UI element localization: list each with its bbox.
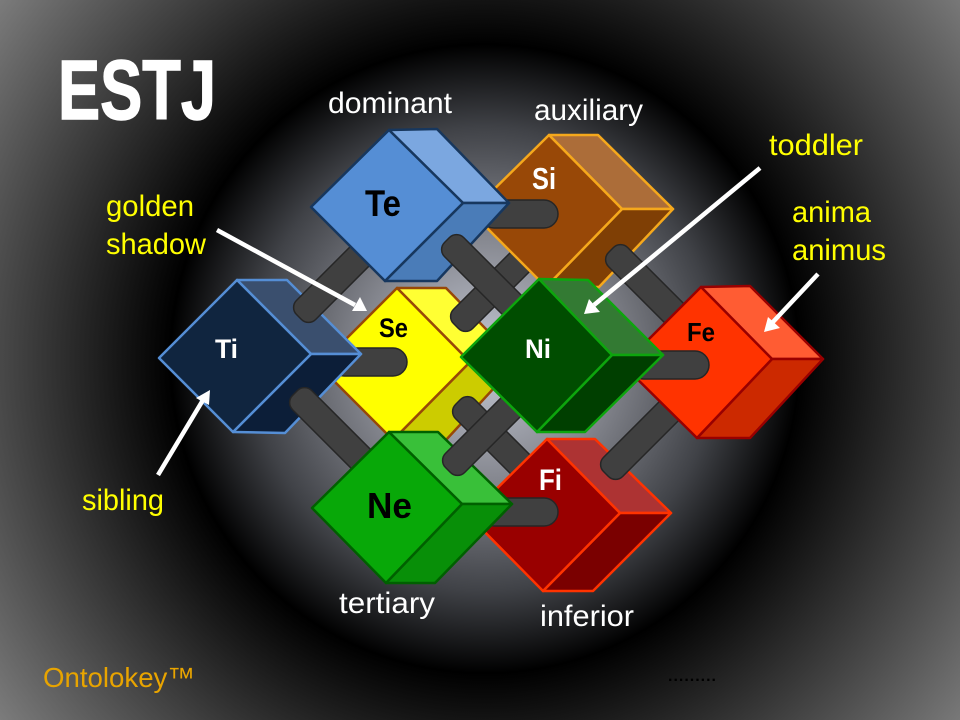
arrow: anima animus to Fe [764, 274, 818, 332]
connector bar: Te to Ti [289, 230, 386, 327]
cube: Ni toddler: Ni [525, 334, 551, 364]
cube: Te dominant: Te [365, 183, 401, 224]
label: anima animus: animus [792, 234, 886, 267]
connector bar: Ni to Fe [630, 351, 709, 379]
arrow: toddler to Ni [584, 168, 760, 314]
connector bar: Ti to Ne [285, 383, 379, 477]
label: sibling: sibling [82, 484, 164, 517]
label: auxiliary: auxiliary [534, 94, 643, 127]
connector bar: Te to Ni [437, 230, 541, 334]
connector bar: Ne to Fi [480, 498, 558, 526]
cube: Ti sibling: Ti [215, 334, 238, 364]
connector bar: Si to Fe [601, 240, 709, 348]
label: tertiary: tertiary [339, 587, 435, 620]
label: dominant: dominant [328, 87, 453, 120]
label: golden shadow: shadow [106, 228, 206, 261]
cube: Fe anima animus [623, 286, 823, 438]
cube: Se golden shadow [319, 288, 518, 440]
arrow: sibling to Ti [158, 390, 210, 475]
cube: Te dominant [311, 129, 509, 281]
brand: Ontolokey: Ontolokey™ [43, 662, 195, 693]
cube: Fi inferior [469, 439, 671, 591]
cube: Ti sibling [159, 280, 361, 433]
footer dots: ......... [668, 668, 716, 685]
cube: Ne tertiary [312, 432, 512, 583]
title: ESTJ [58, 43, 216, 137]
cube: Ni toddler [461, 279, 663, 432]
cube: Ne tertiary: Ne [367, 485, 412, 526]
connector bar: Se to Fi [448, 392, 550, 494]
connector bar: Se to Si [446, 242, 540, 336]
connector bar: Fi to Fe [596, 380, 700, 484]
connector bar: Te to Si [480, 200, 558, 228]
cube: Si auxiliary: Si [532, 161, 556, 196]
cube: Fe anima animus: Fe [687, 317, 715, 347]
cube: Fi inferior: Fi [539, 464, 562, 497]
cube: Se golden shadow: Se [379, 313, 408, 343]
label: anima animus: anima [792, 196, 871, 229]
label: anima animus [792, 196, 886, 267]
label: golden shadow: golden [106, 190, 194, 223]
arrow: golden shadow to Se [217, 230, 367, 311]
cube: Si auxiliary [471, 135, 673, 287]
label: toddler: toddler [769, 129, 863, 162]
label: inferior: inferior [540, 600, 634, 633]
label: golden shadow [106, 190, 206, 261]
connector bar: Ne to Ni [438, 378, 540, 480]
connector bar: Ti to Se [330, 348, 407, 376]
